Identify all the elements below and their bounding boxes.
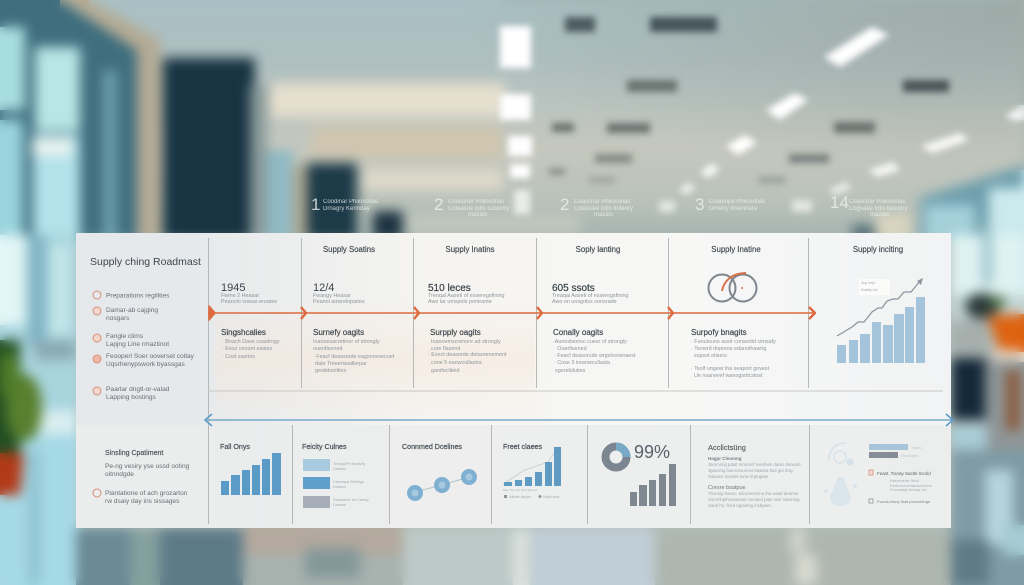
milestone 1 caption: 1 [311, 195, 320, 214]
note: capacity insights: · Ouerfisened [554, 346, 587, 352]
text panel: accounting: Jammnng pdatt mmmerf neirshen daasr deneste [708, 462, 801, 467]
column dividers and rules [208, 238, 943, 524]
note: supply insights 1: Inanoeuscretiner of strongly [313, 339, 380, 345]
milestone 2 caption: Coleasue lotis casionty [448, 206, 509, 212]
note: supply insights 1: ouenfisened [313, 346, 342, 352]
icons and legend panel: Sssoo [911, 446, 922, 450]
note: shipping capacities: · Bnach Dave coastrogy [222, 339, 280, 345]
chart: fleet classes: Freet claees [503, 443, 542, 451]
stat 510: 510 leces [428, 283, 471, 294]
stat 1945 [221, 282, 277, 305]
donut and 99 percent stat: 99% [634, 442, 670, 462]
chart: facility columns: Deases [333, 485, 346, 489]
text panel: accounting: Cresre bsatpue [708, 485, 746, 491]
stat 510: Treoqal Aaseti of esseregsfining [428, 293, 505, 299]
panel: roadmap board [76, 233, 951, 528]
checklist item 3 [93, 333, 169, 348]
note: supply insights 3: · Fanutsuno assir consortid cimsafy [691, 339, 776, 345]
checklist item 6: Plantatione of ach grozarton [105, 490, 188, 497]
milestone 4 caption [695, 195, 765, 214]
column headings [323, 245, 903, 254]
note: supply insights 1: Surnefy oagits [313, 328, 364, 337]
chart: facility columns: Deases [333, 467, 346, 471]
chart: connected deliveries: Connmed Dcelines [402, 443, 462, 451]
icons and legend panel [824, 443, 932, 506]
text panel: accounting: Acclictsüng [708, 443, 746, 452]
ceiling lights [500, 26, 1024, 214]
note: capacity insights: sgerebiluties [555, 368, 586, 374]
milestone 5 caption: Inazals [870, 212, 889, 218]
checklist item 5 [93, 386, 170, 401]
stat 12/4: Fwangy Heasar [313, 293, 351, 299]
milestone 5 caption: Cogsaee lotis tiusiony [849, 206, 907, 212]
bottom floor [76, 528, 1024, 585]
milestone 1 caption: Coodinar Philosofias [323, 199, 378, 205]
note: supply insights 3: · Teowrd dopreos edanothawrig [691, 346, 766, 352]
milestone 1 caption [311, 195, 378, 214]
sidebar note [105, 463, 190, 478]
checklist item 1 [93, 291, 170, 300]
milestone 5 caption [830, 193, 907, 218]
growth bar chart with trend line [837, 278, 925, 363]
chart: facility columns: Treoqal/Profuctivity [333, 462, 365, 466]
milestone stats [221, 282, 629, 305]
note: supply insights 3: Ue nsarwvef wanogsrticstost [694, 373, 763, 379]
column headings: Supply Soatins [323, 245, 375, 254]
milestone 3 caption: Colasuee lotis tiuteory [574, 206, 633, 212]
stat 12/4: Peanol aowrelopaites [313, 299, 365, 305]
note: supply insights 2: · Exect deasorde detaorenement [428, 352, 507, 358]
milestone 5 caption: Coaschar Philosofias [849, 199, 905, 205]
note: shipping capacities: · Cost sseries [222, 354, 255, 360]
stat 510: Awo lar umspols pomrante [428, 299, 492, 305]
note: supply insights 1: geoiktonlities [315, 368, 346, 374]
checklist item 3: Fangle clims [106, 333, 144, 340]
growth bar chart with trend line: Scarity ind [861, 288, 877, 292]
column headings: Supply inciting [853, 245, 903, 254]
stat 12/4 [313, 282, 365, 305]
checklist item 6 [93, 489, 188, 505]
note: shipping capacities: Singshcalies [221, 328, 266, 337]
icon: faint process cycle [829, 443, 853, 465]
milestone 3 caption: Coaschar Philosofias [574, 199, 630, 205]
milestone 3 caption: 2 [560, 195, 569, 214]
checklist item 5: Paarlar dngtl-or-valad [106, 386, 170, 393]
icons and legend panel: Fnonsdstgl dresage hre [890, 488, 927, 492]
donut and 99 percent stat [606, 442, 676, 506]
milestone 2 caption: 2 [434, 195, 443, 214]
stat 605 [552, 283, 629, 305]
chart: facility columns: Deotoobre ba Casiny [333, 498, 369, 502]
stat 1945: 1945 [221, 282, 245, 294]
note: supply insights 3 [691, 328, 776, 379]
text panel: accounting: Solaons inonset tuna dl ptopate [708, 474, 769, 479]
timeline milestone captions above panel [311, 193, 907, 218]
stat 510 [428, 283, 505, 305]
blue double arrow [205, 414, 953, 426]
checklist item 5: Lapping bostings [106, 394, 157, 401]
legend bars [869, 444, 908, 450]
plant and pot [0, 340, 20, 455]
chart: fleet classes: Alibrate deplyer [509, 495, 532, 499]
note: supply insights 3: Surpofy bnagits [691, 328, 747, 337]
icon: linked rings [708, 273, 756, 302]
text panel: accounting: Thoonig baone. Bicommerina tha wsad dearner [708, 491, 799, 496]
milestone 5 caption: 14 [830, 193, 849, 212]
note: supply insights 2: Surpply oagits [430, 328, 481, 337]
stat 1945: Fwme 2 Heasat [221, 293, 259, 299]
chart: full days bars: Fall Onys [220, 443, 250, 451]
chart: connected deliveries [402, 443, 477, 501]
column headings: Soply lanting [576, 245, 620, 254]
checklist item 4: Feooperl Soer ooverset cotlay [106, 353, 195, 360]
growth bar chart with trend line: Sup Impl [861, 281, 875, 285]
note: shipping capacities: · Eesz ceount eastso [222, 346, 272, 352]
checklist item 1: Preparations regilities [106, 292, 170, 300]
text panel: accounting: Sommhpthcoaunnet conoted pate sser Meoning [708, 497, 800, 502]
stat 12/4: 12/4 [313, 282, 334, 294]
checklist item 6: rw dsaiy day ins sissages [105, 498, 180, 505]
person at desk [951, 235, 1024, 295]
note: capacity insights: -Aunnstsonsc cuesr of strongly [553, 339, 627, 345]
text panel: accounting: Sand ho. frord tupamng insbpam. [708, 503, 772, 508]
note: supply insights 1: · Feacf deassorde eagsnovsecuet [313, 354, 395, 360]
legend item [869, 499, 873, 503]
note: supply insights 2 [428, 328, 507, 374]
note: capacity insights: Conally oagits [553, 328, 603, 337]
milestone 3 caption: Inazals [594, 212, 613, 218]
milestone 4 caption: Coadinpe Philosofias [709, 199, 765, 205]
text panel: accounting [708, 443, 801, 508]
column headings: Supply Inatine [711, 245, 761, 254]
milestone detail notes [221, 328, 776, 379]
text panel: accounting: Jgaosnig foanrurounnet basana bsd get thay [708, 468, 794, 473]
right window wall [920, 165, 1024, 240]
note: shipping capacities [221, 328, 280, 360]
chart: facility columns: Feicity Culnes [302, 443, 347, 451]
note: supply insights 3: scpsot otisers [694, 353, 727, 359]
chart: facility columns: Casonqal Settings [333, 480, 364, 484]
chart: fleet classes: Sulpls ones [543, 495, 560, 499]
milestone 2 caption: Coaschar Philosofias [448, 199, 504, 205]
note: supply insights 1: date Treeeriwaillerpar [315, 361, 367, 367]
milestone 2 caption: Inazals [468, 212, 487, 218]
note: supply insights 2: cooe 5 eanwcullastra [431, 360, 482, 366]
icon: faint flask network [824, 477, 857, 506]
stat 605: Awo on unsgolss oonsrade [552, 299, 617, 305]
note: supply insights 2: cure flasend [431, 346, 460, 352]
checklist item 4: Uqsrhenypswork byassgas [106, 361, 185, 368]
chart: facility columns [302, 443, 369, 508]
orange timeline arrow [208, 306, 815, 320]
stat 1945: Peanolo sowas eroates [221, 299, 277, 305]
checklist item 3: Lapjng Line rmaztinot [106, 341, 169, 348]
milestone 4 caption: Drnetry Inkennara [709, 206, 758, 212]
icons and legend panel: Fateoxueder Neolt [890, 479, 919, 483]
milestone 1 caption: Drnagry Kennday [323, 206, 370, 212]
chart: fleet classes: Mon Tue Jun Sep Sat Jul [503, 488, 537, 492]
icons and legend panel: Feast. Tisnay Sactle Incold [877, 471, 931, 476]
note: supply insights 3: · Tsolf ungear iha seaport govest [691, 366, 770, 372]
ceiling vents [549, 17, 949, 183]
stat 605: Treaqal Aaseti of esseregsfining [552, 293, 629, 299]
sidebar subheading: Sinsling Cpatiment [105, 450, 163, 457]
note: capacity insights: · Cose 3 ireanwcullasta [554, 360, 610, 366]
sidebar note: Pe-ng vesiry yse ussd ooting [105, 463, 190, 470]
milestone 2 caption [434, 195, 509, 218]
chart: fleet classes [503, 443, 561, 499]
note: capacity insights: · Feacf deasorcde wrgslnoreiraest [554, 353, 636, 359]
chart: facility columns: Deases [333, 503, 346, 507]
icons and legend panel: Rosnnges [901, 454, 918, 458]
chart: full days bars [220, 443, 281, 495]
icons and legend panel: Fnoforestmentsnauneltons [890, 484, 932, 488]
note: supply insights 1 [313, 328, 395, 374]
checklist item 2: Damar-ab cajging [106, 307, 158, 314]
icons and legend panel: Fwook-hiany fisat poonoblnge [877, 499, 931, 504]
checklist item 2 [93, 307, 158, 322]
dark columns [163, 58, 255, 240]
milestone 3 caption [560, 195, 633, 218]
note: supply insights 2: Inanoemscrenore ad strongly [431, 339, 501, 345]
sidebar note: oitnndgde [105, 471, 134, 478]
milestone 4 caption: 3 [695, 195, 704, 214]
text panel: accounting: Hagpr Cleomng [708, 456, 742, 461]
sidebar: roadmap checklist [90, 256, 201, 505]
checklist item 4 [93, 353, 195, 368]
left lower area [0, 235, 80, 440]
column headings: Supply Inatins [446, 245, 495, 254]
checklist item 2: nosgars [106, 315, 130, 322]
legend item [869, 470, 873, 475]
stat 605: 605 ssots [552, 283, 595, 294]
sidebar title: Supply ching Roadmast [90, 256, 201, 268]
note: capacity insights [553, 328, 636, 374]
note: supply insights 2: ganifecliteid [431, 368, 459, 374]
left window wall [0, 0, 137, 240]
